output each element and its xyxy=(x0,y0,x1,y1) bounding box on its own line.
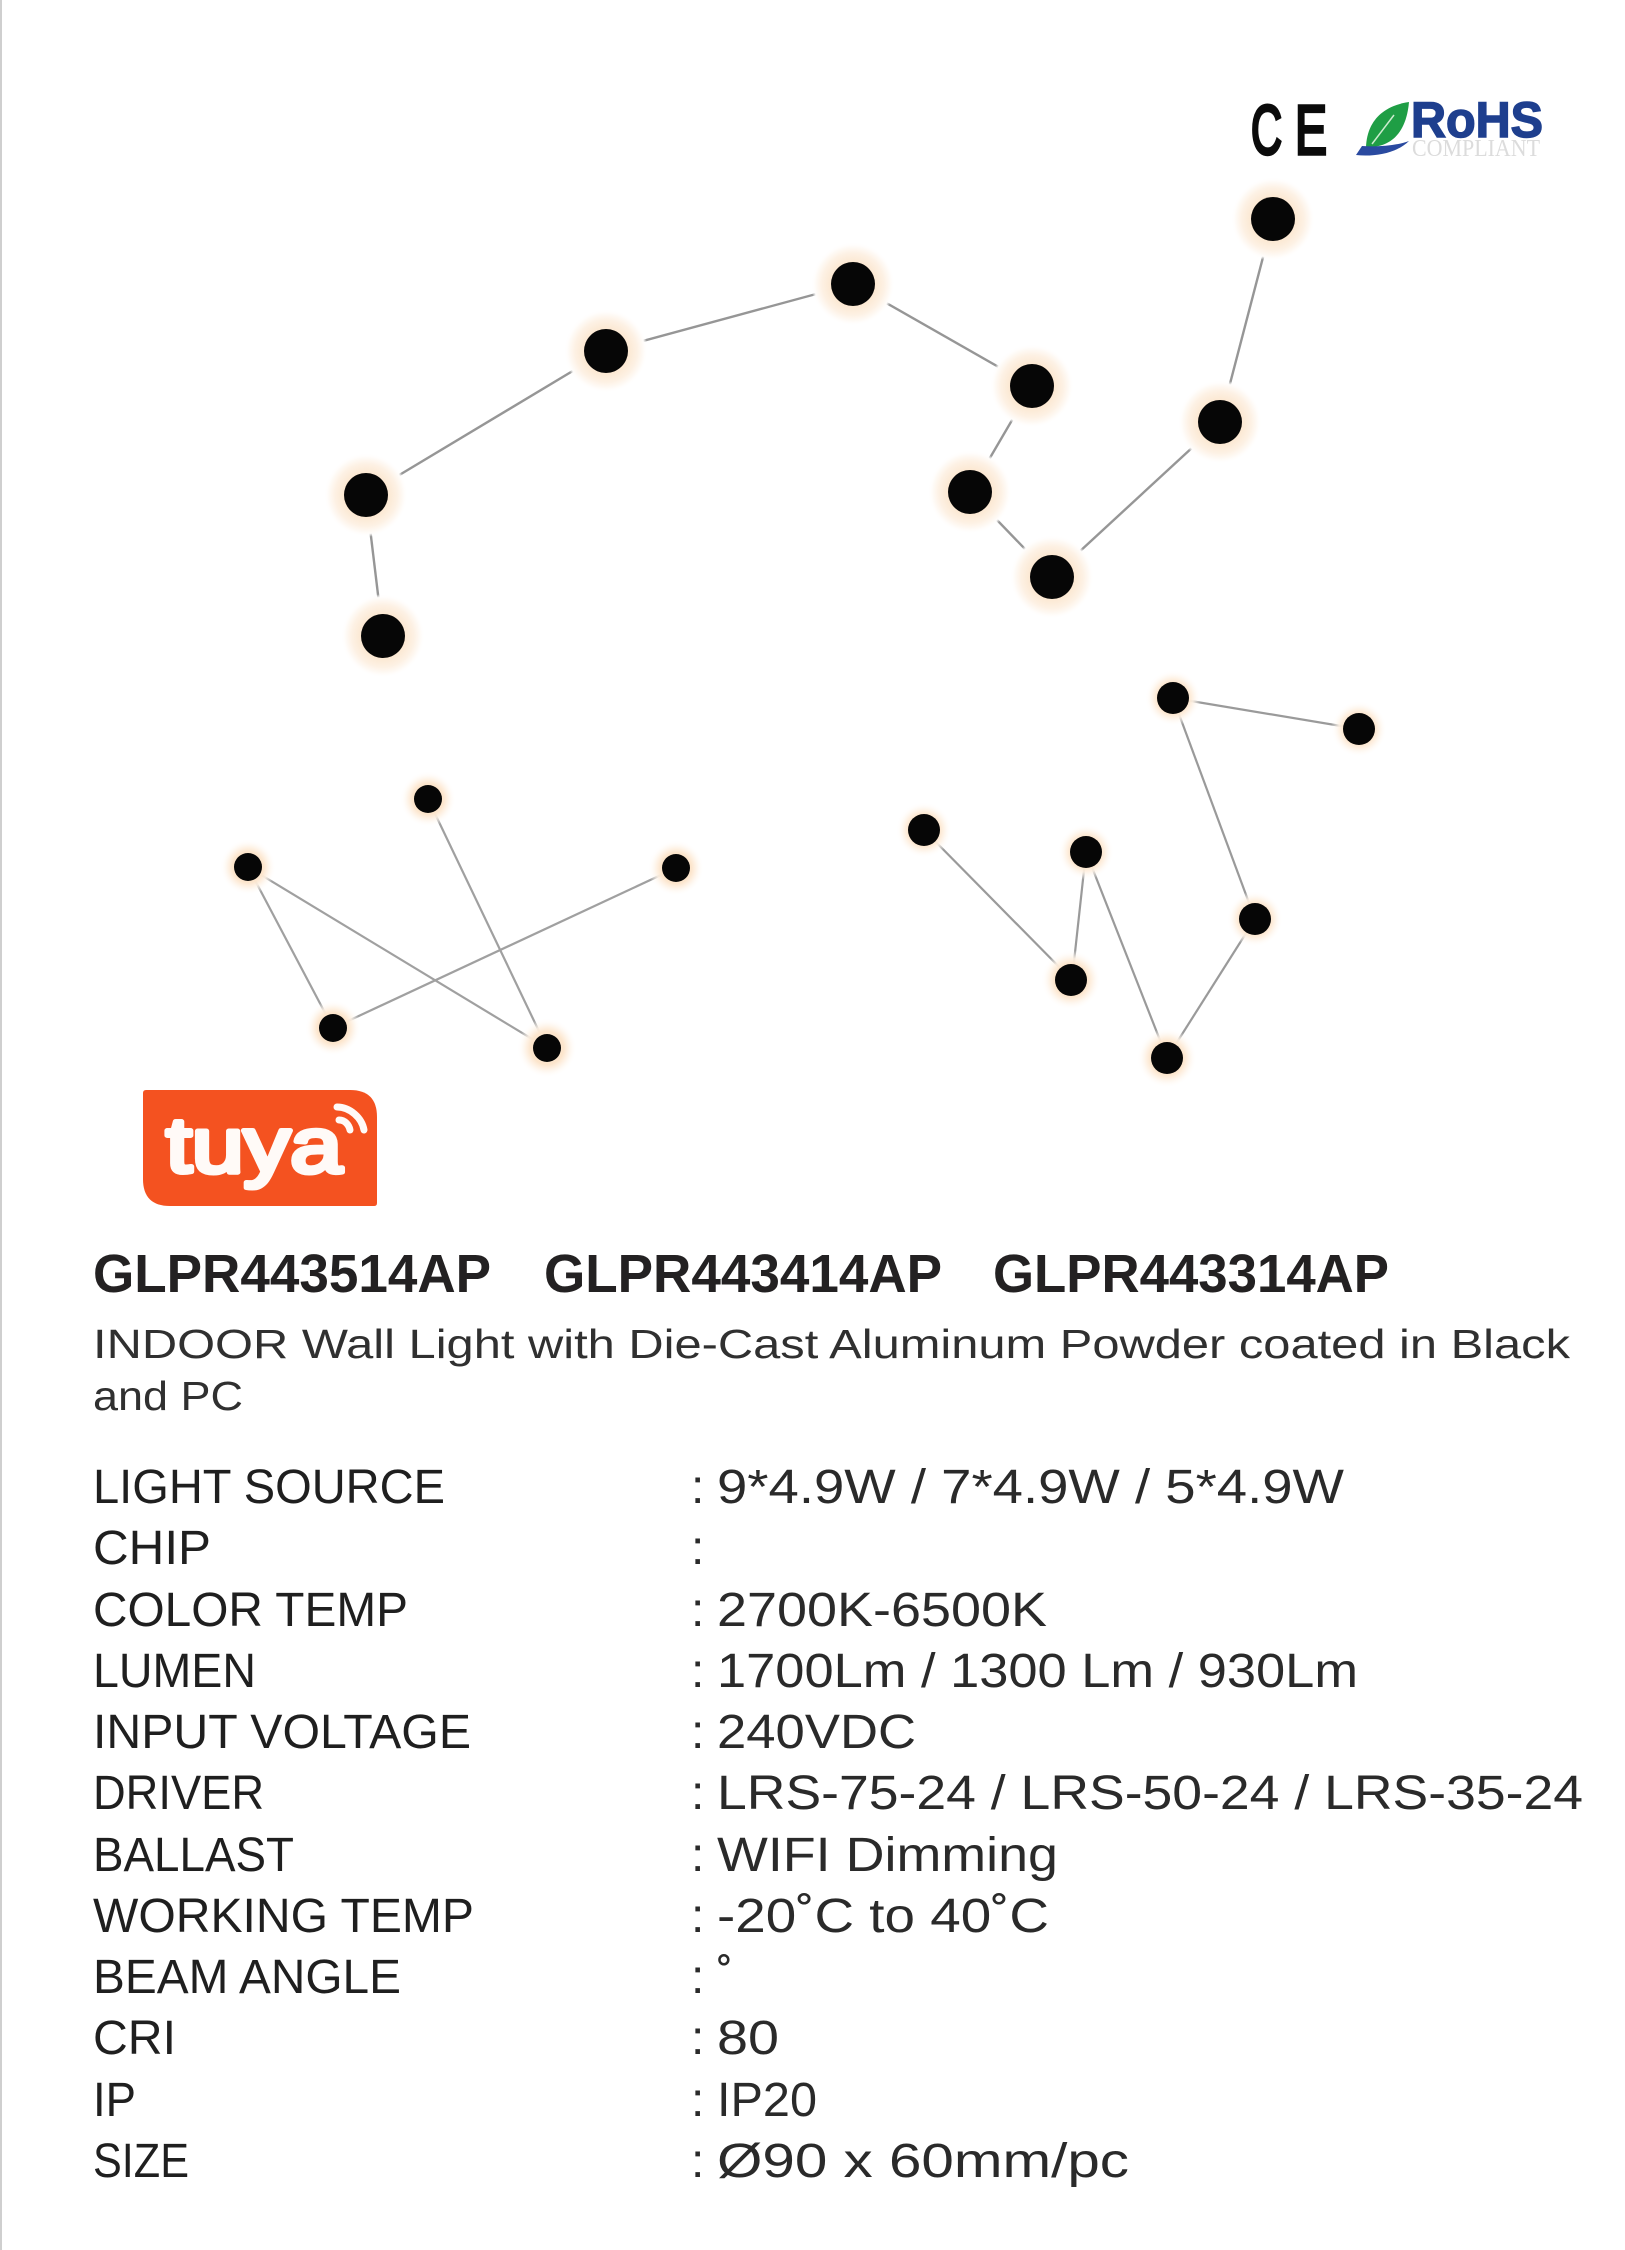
icon: CE mark xyxy=(1251,91,1327,169)
row: cri: : xyxy=(691,2012,704,2065)
constellation light: lower right group xyxy=(896,670,1387,1088)
row: ballast: : xyxy=(691,1829,704,1882)
row: lumen: : xyxy=(691,1645,704,1698)
row: chip xyxy=(93,1522,704,1575)
row: lumen xyxy=(93,1645,1358,1698)
row: input voltage: : xyxy=(691,1706,704,1759)
row: input voltage: INPUT VOLTAGE xyxy=(93,1706,471,1759)
row: light source: LIGHT SOURCE xyxy=(93,1461,445,1514)
text block: product description: INDOOR Wall Light with Die-Cast Aluminum Powder coated in Black xyxy=(93,1321,1571,1367)
row: ballast: BALLAST xyxy=(93,1829,294,1882)
row: working temp: WORKING TEMP xyxy=(93,1890,474,1943)
row: light source: 9*4.9W / 7*4.9W / 5*4.9W xyxy=(717,1461,1345,1514)
icon: CE mark: C xyxy=(1251,91,1282,169)
row: beam angle: : xyxy=(691,1951,704,2004)
heading: model numbers: GLPR443414AP xyxy=(544,1244,942,1304)
row: ip xyxy=(93,2074,817,2127)
row: color temp: : xyxy=(691,1584,704,1637)
row: beam angle: ˚ xyxy=(717,1951,733,2004)
row: driver: LRS-75-24 / LRS-50-24 / LRS-35-24 xyxy=(717,1767,1583,1820)
icon: tuya logo: tuya xyxy=(166,1101,343,1189)
row: ip: IP20 xyxy=(717,2074,817,2127)
row: input voltage xyxy=(93,1706,916,1759)
row: driver xyxy=(93,1767,1583,1820)
row: cri: CRI xyxy=(93,2012,176,2065)
row: beam angle: BEAM ANGLE xyxy=(93,1951,401,2004)
text block: product description: and PC xyxy=(93,1373,243,1419)
row: ballast xyxy=(93,1829,1058,1882)
row: lumen: LUMEN xyxy=(93,1645,256,1698)
row: cri xyxy=(93,2012,779,2065)
row: light source xyxy=(93,1461,1345,1514)
row: lumen: 1700Lm / 1300 Lm / 930Lm xyxy=(717,1645,1358,1698)
icon: CE mark: E xyxy=(1295,91,1327,169)
row: driver: : xyxy=(691,1767,704,1820)
heading: model numbers: GLPR443314AP xyxy=(993,1244,1389,1304)
row: ip: : xyxy=(691,2074,704,2127)
row: color temp xyxy=(93,1584,1047,1637)
row: working temp: : xyxy=(691,1890,704,1943)
specification table xyxy=(93,1461,1583,2188)
row: ballast: WIFI Dimming xyxy=(717,1829,1058,1882)
row: cri: 80 xyxy=(717,2012,779,2065)
row: input voltage: 240VDC xyxy=(717,1706,916,1759)
icon: RoHS compliant logo: RoHS xyxy=(1411,92,1543,148)
text block: product description xyxy=(93,1321,1571,1419)
row: chip: CHIP xyxy=(93,1522,211,1575)
row: working temp xyxy=(93,1890,1049,1943)
row: size: Ø90 x 60mm/pc xyxy=(717,2135,1129,2188)
heading: model numbers: GLPR443514AP xyxy=(93,1244,491,1304)
row: light source: : xyxy=(691,1461,704,1514)
row: chip: : xyxy=(691,1522,704,1575)
row: size: SIZE xyxy=(93,2135,189,2188)
icon: RoHS compliant logo xyxy=(1356,92,1543,162)
row: size xyxy=(93,2135,1129,2188)
row: color temp: 2700K-6500K xyxy=(717,1584,1047,1637)
icon: tuya logo xyxy=(143,1090,377,1206)
constellation light: top group xyxy=(324,177,1315,678)
row: driver: DRIVER xyxy=(93,1767,264,1820)
row: size: : xyxy=(691,2135,704,2188)
constellation light: lower left group xyxy=(220,771,704,1078)
row: working temp: -20˚C to 40˚C xyxy=(717,1890,1049,1943)
row: ip: IP xyxy=(93,2074,136,2127)
row: beam angle xyxy=(93,1951,733,2004)
row: color temp: COLOR TEMP xyxy=(93,1584,408,1637)
icon: RoHS compliant logo: COMPLIANT xyxy=(1412,136,1540,162)
heading: model numbers xyxy=(93,1244,1389,1304)
